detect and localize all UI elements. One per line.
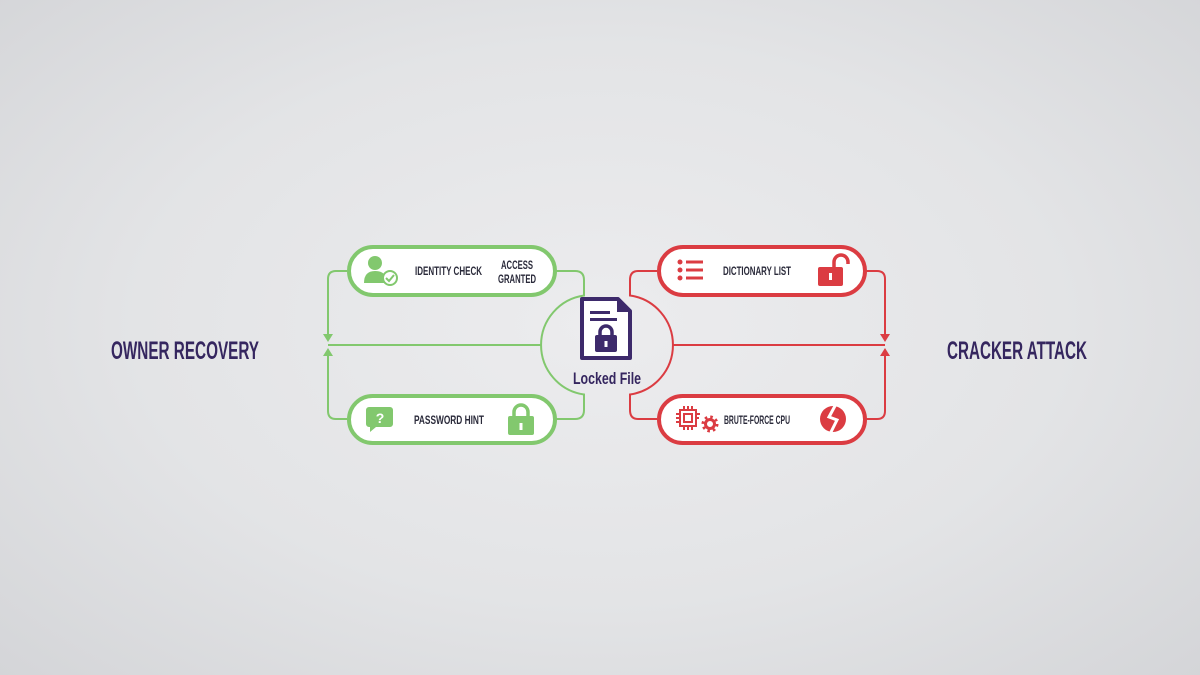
arrows: green: [323, 334, 333, 356]
panel: dictionary list: DICTIONARY LIST: [723, 264, 791, 278]
label: locked file: Locked File: [573, 369, 641, 388]
connectors: green: [328, 271, 584, 419]
icon: question bubble: [366, 407, 393, 432]
panel: password hint: PASSWORD HINT: [414, 413, 484, 427]
panel: identity check: ACCESS: [501, 258, 533, 272]
panel: password hint: [349, 396, 555, 443]
panel: identity check: [349, 247, 555, 295]
panel: identity check: IDENTITY CHECK: [415, 264, 482, 278]
icon: open lock: [818, 255, 848, 286]
panel: brute-force cpu: BRUTE-FORCE CPU: [724, 413, 790, 427]
icon: broken circle: [820, 404, 846, 434]
icon: lock: [508, 405, 534, 435]
icon: locked file: [582, 299, 630, 358]
connectors: red: [630, 271, 885, 419]
title: owner recovery: OWNER RECOVERY: [111, 337, 259, 365]
panel: brute-force cpu: [659, 396, 865, 443]
icon: cpu gear: [676, 406, 717, 431]
panel: dictionary list: [659, 247, 865, 295]
panel: identity check: GRANTED: [498, 272, 536, 286]
icon: question bubble: ?: [376, 410, 384, 426]
arrows: red: [880, 334, 890, 356]
icon: list: [678, 260, 703, 280]
title: cracker attack: CRACKER ATTACK: [947, 337, 1087, 365]
icon: user check: [364, 256, 397, 285]
